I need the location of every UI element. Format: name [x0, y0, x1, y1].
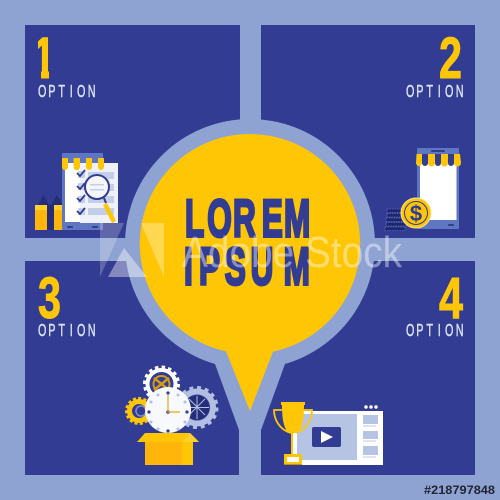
- option 4 heading: OPTION: [406, 321, 464, 341]
- awning gaps: [422, 154, 454, 166]
- watermark: Adobe Stock: [182, 228, 403, 277]
- icon: phone shop with coin: [385, 148, 461, 230]
- icon: phone shop with coin: $: [410, 201, 422, 226]
- coin: [401, 198, 431, 228]
- panel 4 background: [261, 261, 475, 475]
- option 3 heading: OPTION: [38, 321, 96, 341]
- icon: video window and trophy: [274, 402, 383, 465]
- option 1 heading: 1: [33, 26, 55, 91]
- yellow gear: [126, 398, 152, 424]
- clock: [145, 387, 191, 433]
- trophy: [274, 410, 312, 433]
- panel 1 background: [25, 25, 240, 238]
- blue gear: [177, 388, 217, 428]
- awning: [416, 154, 461, 166]
- option 4 heading: 4: [439, 266, 463, 331]
- check marks: [77, 170, 85, 214]
- icon: gift boxes: [35, 195, 63, 230]
- central title: LOREM: [185, 190, 310, 249]
- icon: phone with checklist and magnifier: [62, 153, 118, 230]
- checklist rows: [78, 171, 114, 215]
- coin stacks: [385, 209, 407, 230]
- icon: clock, gears and box: [126, 367, 217, 465]
- option 1 heading: OPTION: [38, 82, 96, 102]
- central yellow pin: [140, 134, 360, 411]
- option 3 heading: 3: [38, 266, 61, 331]
- option 2 heading: 2: [439, 26, 462, 91]
- panel 3 background: [25, 261, 240, 475]
- window dots: [364, 405, 378, 409]
- central title: [184, 190, 310, 297]
- central pin ring: [125, 119, 375, 475]
- option 3 heading: [38, 266, 96, 341]
- option 4 heading: [406, 266, 464, 341]
- white gear: [144, 367, 178, 401]
- video window: [295, 411, 383, 465]
- watermark: [100, 223, 403, 277]
- option 2 heading: OPTION: [406, 82, 464, 102]
- box: [137, 433, 199, 442]
- stock id: #218797848: [424, 485, 496, 497]
- option 1 heading: [38, 37, 95, 98]
- magnifier: [85, 175, 109, 199]
- option 2 heading: [406, 26, 464, 102]
- panel 2 background: [261, 25, 475, 238]
- central title: IPSUM: [184, 238, 310, 297]
- awning: [62, 158, 104, 170]
